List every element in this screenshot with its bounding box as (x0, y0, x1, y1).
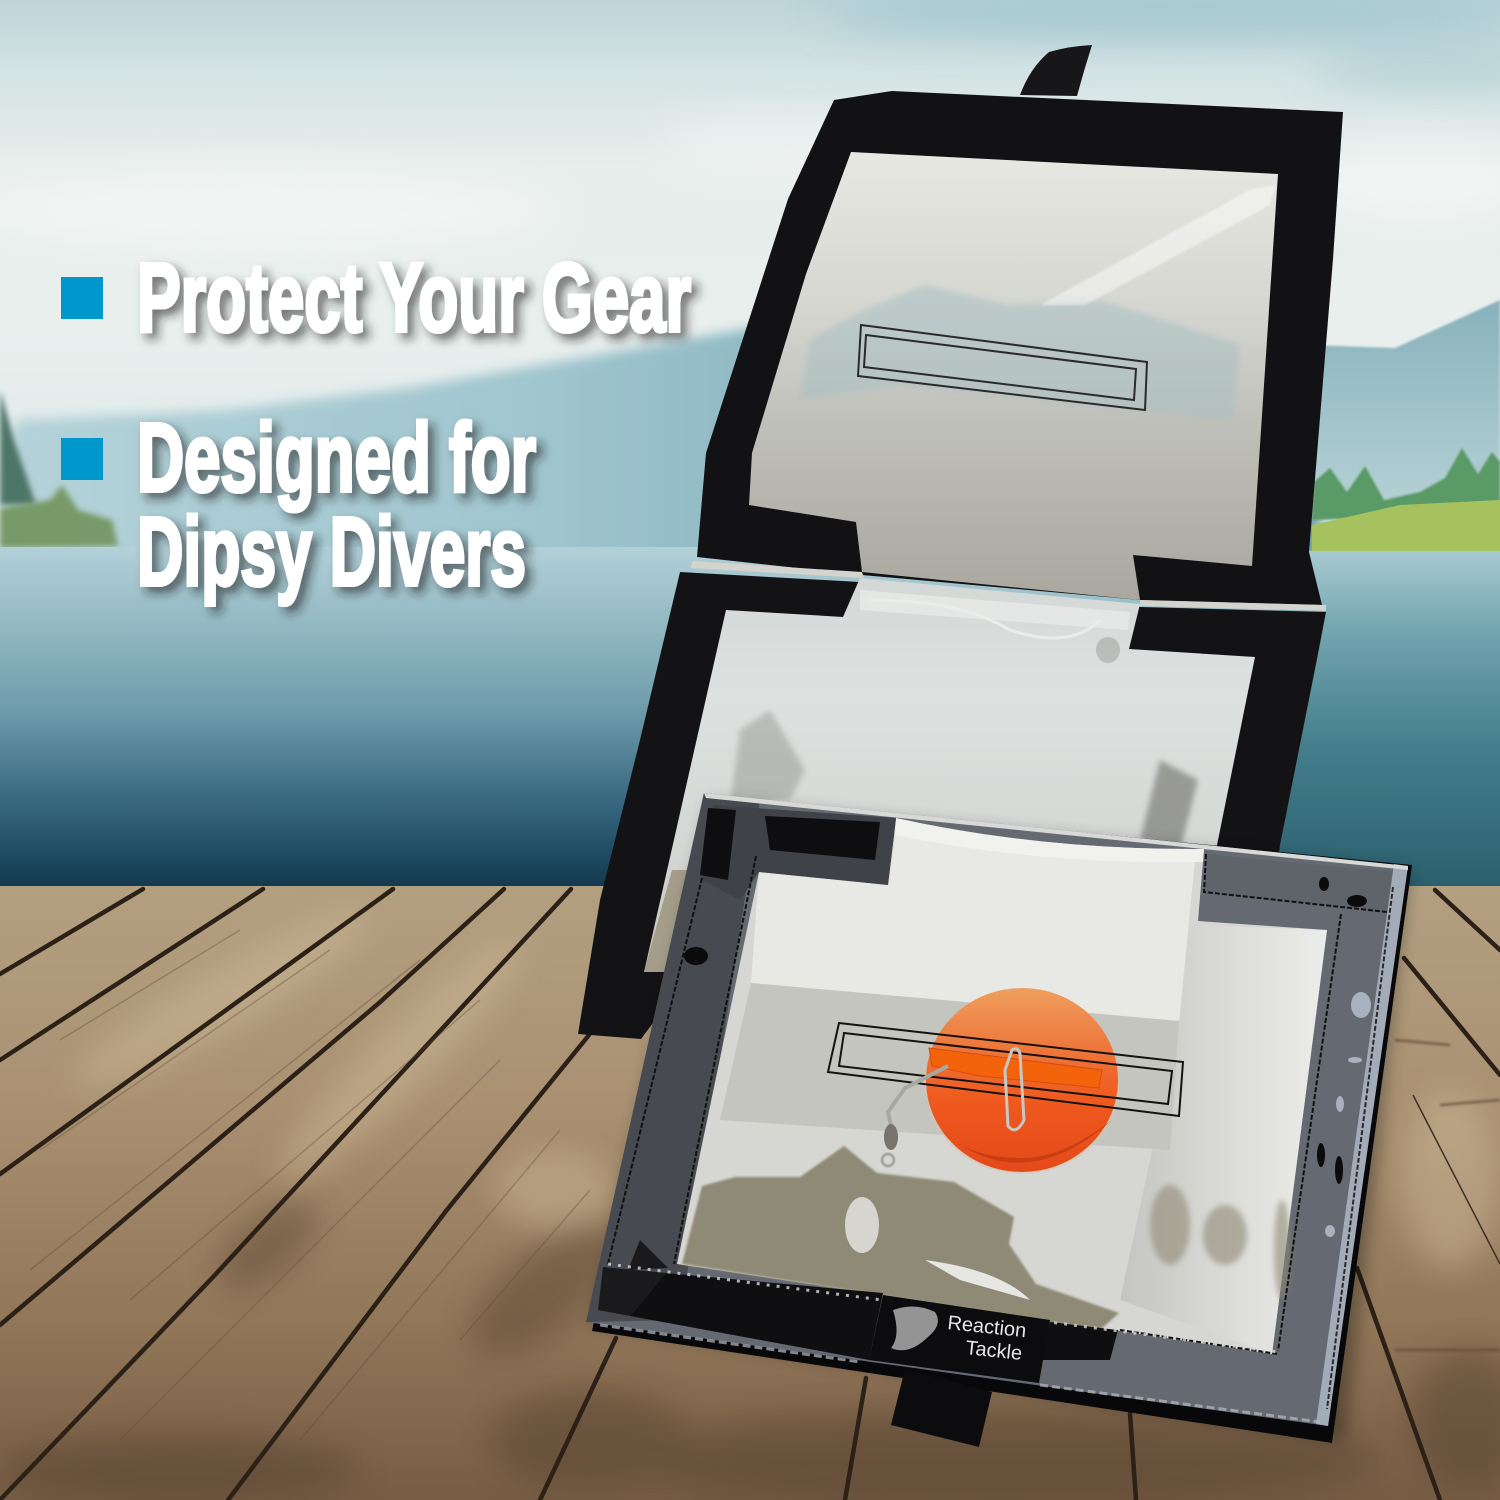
deck (0, 886, 1500, 1500)
seam dots (608, 1264, 1278, 1352)
heading text: Dipsy Divers (137, 497, 526, 606)
tab (1020, 45, 1092, 96)
lower clear window (644, 578, 1255, 972)
heading text: Designed for (137, 403, 536, 512)
bullet square (61, 438, 103, 480)
shadow (590, 800, 1410, 1440)
upper panel frame (697, 91, 1343, 605)
lower panel frame (578, 572, 1326, 1039)
heading text (137, 403, 536, 606)
stitching (608, 854, 1393, 1409)
mountains (0, 300, 1500, 560)
black patches (702, 805, 896, 900)
sleeve clear window (677, 818, 1327, 1354)
upper clear window (749, 152, 1278, 600)
product: front clear sleeve (586, 793, 1412, 1447)
stitched slot lower (828, 1023, 1183, 1116)
logo label: Reaction (946, 1312, 1027, 1342)
logo label (869, 1295, 1050, 1383)
logo label: Tackle (964, 1337, 1023, 1365)
water (0, 547, 1290, 888)
product: open wallet back (578, 45, 1343, 1039)
bottom tan reflection (682, 1146, 1119, 1330)
icon: swivel and snap (882, 1049, 1024, 1166)
bullet 2: Designed for Dipsy Divers (61, 403, 536, 606)
bullet square (61, 277, 103, 319)
heading text: Protect Your Gear (137, 243, 691, 352)
fold line (690, 561, 1326, 611)
distant trees right (1312, 448, 1500, 551)
bottom tab (891, 1369, 992, 1447)
back edge (592, 795, 1412, 1443)
stitched slot upper (858, 325, 1147, 410)
icon: orange dipsy diver (925, 988, 1119, 1174)
distant trees left (0, 390, 118, 548)
bullet 1: Protect Your Gear (61, 243, 691, 352)
sleeve body (586, 793, 1408, 1426)
